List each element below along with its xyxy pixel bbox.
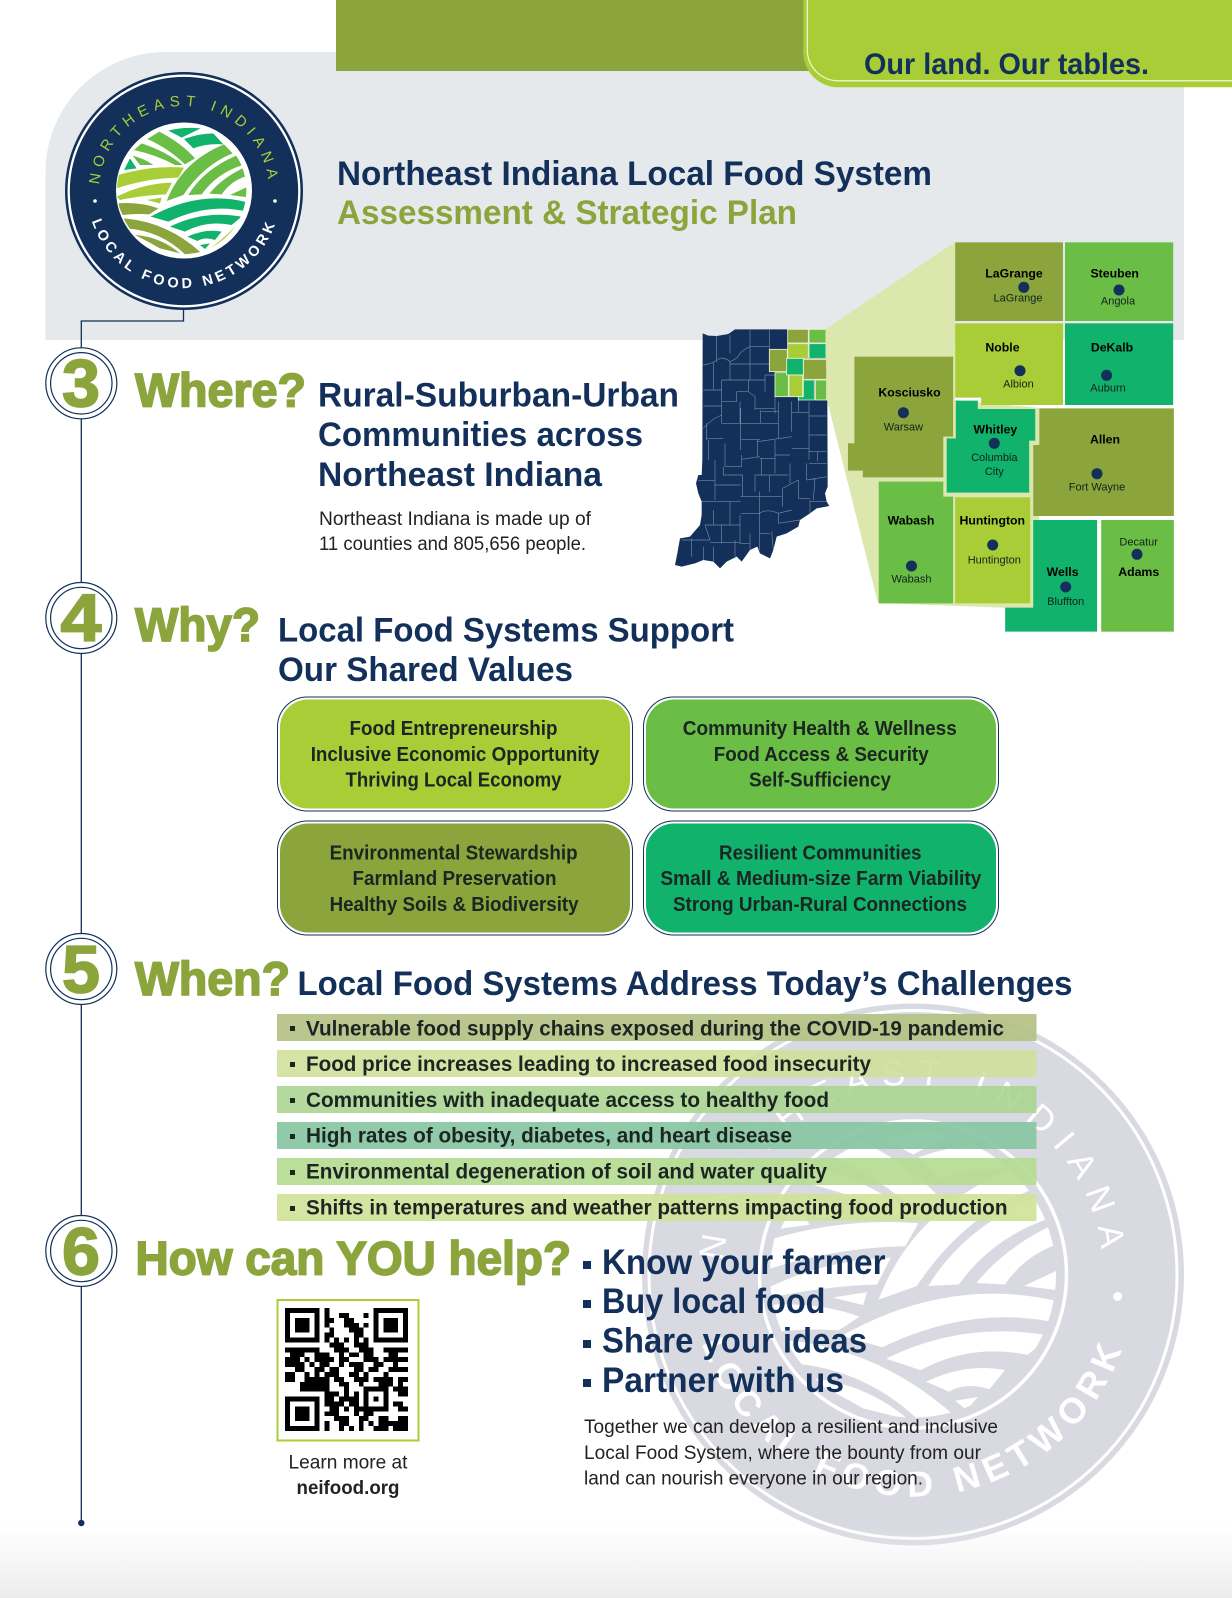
section 4 subheading: Local Food Systems Support <box>278 612 734 650</box>
challenge list: Shifts in temperatures and weather patterns impacting food production <box>306 1196 1008 1220</box>
section 3 heading: Where? <box>135 364 306 417</box>
title: Northeast Indiana Local Food System <box>337 155 932 193</box>
header tab with tagline <box>803 0 1232 87</box>
map: Indiana state <box>675 329 829 568</box>
value box: resilience: Strong Urban-Rural Connections <box>673 894 967 916</box>
map: county labels: Angola <box>1101 295 1136 307</box>
section 5 number: 5 <box>62 932 100 1008</box>
value box: economy: Food Entrepreneurship <box>350 718 558 740</box>
challenge list: Food price increases leading to increased food insecurity <box>306 1053 871 1076</box>
section 6 number: 6 <box>62 1214 100 1290</box>
tagline: Our land. Our tables. <box>864 48 1149 81</box>
header bar: olive <box>336 0 816 71</box>
panel: header background <box>46 52 1184 340</box>
value box: health: Food Access & Security <box>714 744 930 766</box>
value box: economy: Thriving Local Economy <box>346 770 562 792</box>
logo badge <box>65 72 303 310</box>
challenge list <box>277 1014 1036 1221</box>
watermark logo: NORTHEAST INDIANA <box>699 1077 1124 1258</box>
logo bottom text: LOCAL FOOD NETWORK <box>92 218 275 288</box>
map: county labels: Noble <box>985 341 1020 355</box>
section 5 heading: When? <box>135 952 290 1005</box>
map: county labels: LaGrange <box>994 293 1042 305</box>
map: zoom wedge <box>826 242 1039 608</box>
challenge list: Communities with inadequate access to healthy food <box>306 1089 829 1112</box>
map: county labels: Steuben <box>1090 267 1139 281</box>
section 3 body text <box>319 509 592 555</box>
call to action list <box>583 1243 886 1400</box>
logo fields <box>117 128 251 254</box>
call to action list: Buy local food <box>602 1282 826 1321</box>
map: county labels: Allen <box>1090 432 1120 446</box>
value box: resilience: Small & Medium-size Farm Viability <box>660 868 982 890</box>
section 5 subheading: Local Food Systems Address Today’s Challenges <box>298 965 1072 1003</box>
section 3 body text: Northeast Indiana is made up of <box>319 509 592 530</box>
section 4 subheading: Our Shared Values <box>278 651 573 689</box>
call to action list: Know your farmer <box>602 1243 886 1282</box>
closing paragraph: Together we can develop a resilient and inclusive <box>584 1417 998 1438</box>
value box: resilience: Resilient Communities <box>719 842 922 864</box>
map: county labels: DeKalb <box>1091 341 1133 355</box>
map: county labels: Auburn <box>1090 383 1126 395</box>
logo top text: NORTHEAST INDIANA <box>88 96 278 184</box>
value box: resilience <box>644 821 998 935</box>
map: county labels: Wabash <box>888 514 934 528</box>
value box: economy: Inclusive Economic Opportunity <box>311 744 600 766</box>
bottom page fade <box>0 1525 1232 1598</box>
closing paragraph: land can nourish everyone in our region. <box>584 1468 923 1490</box>
map: county labels: Huntington <box>968 555 1021 567</box>
QR caption <box>288 1452 408 1499</box>
value box: environment: Environmental Stewardship <box>330 842 578 864</box>
value box: environment: Healthy Soils & Biodiversity <box>330 894 579 916</box>
map: county labels: Wells <box>1047 565 1079 579</box>
call to action list: Share your ideas <box>602 1322 867 1360</box>
map: county labels <box>878 267 1159 608</box>
map: county labels: Decatur <box>1119 536 1158 548</box>
section 4 subheading <box>278 612 734 689</box>
closing paragraph: Local Food System, where the bounty from our <box>584 1443 982 1464</box>
value box: health: Community Health & Wellness <box>683 718 957 740</box>
map: county labels: City <box>985 466 1004 478</box>
map: county labels: Adams <box>1118 565 1159 579</box>
section 4 heading: Why? <box>135 598 260 651</box>
challenge list: Environmental degeneration of soil and water quality <box>306 1160 827 1184</box>
section 5 number <box>46 932 117 1008</box>
section 6 heading: How can YOU help? <box>136 1232 571 1284</box>
section 3 body text: 11 counties and 805,656 people. <box>319 534 586 555</box>
map: county labels: Albion <box>1003 378 1034 390</box>
QR caption: neifood.org <box>296 1478 400 1499</box>
challenge list: High rates of obesity, diabetes, and heart disease <box>306 1124 792 1148</box>
title <box>337 155 932 232</box>
section 3 subheading <box>318 377 679 494</box>
section 4 number: 4 <box>60 581 102 656</box>
value box: environment: Farmland Preservation <box>352 868 556 890</box>
value box: environment <box>278 821 632 935</box>
map: county labels: Kosciusko <box>878 386 941 400</box>
section 6 number <box>46 1214 117 1290</box>
timeline end dot <box>78 1520 85 1526</box>
map: county labels: Wabash <box>892 574 931 586</box>
map: county labels: Fort Wayne <box>1069 482 1125 494</box>
section 3 subheading: Northeast Indiana <box>318 456 603 494</box>
section 4 number <box>46 581 117 656</box>
section 3 number <box>46 347 117 422</box>
map: county labels: Whitley <box>974 422 1017 436</box>
challenge list: Vulnerable food supply chains exposed during the COVID-19 pandemic <box>306 1018 1004 1040</box>
map: county blocks <box>848 242 1174 632</box>
watermark logo: LOCAL FOOD NETWORK <box>702 1337 1122 1497</box>
map: county labels: Bluffton <box>1047 596 1084 608</box>
highlighted counties <box>769 329 827 400</box>
value box: health <box>644 697 998 811</box>
call to action list: Partner with us <box>602 1361 844 1400</box>
section 3 number: 3 <box>62 347 100 422</box>
section 3 subheading: Communities across <box>318 416 643 454</box>
section 3 subheading: Rural-Suburban-Urban <box>318 377 679 415</box>
closing paragraph <box>584 1417 998 1490</box>
map: county labels: LaGrange <box>985 267 1043 281</box>
map: county labels: Huntington <box>960 514 1025 528</box>
map: county labels: Warsaw <box>884 422 923 434</box>
watermark logo <box>642 1004 1184 1546</box>
QR caption: Learn more at <box>288 1452 408 1474</box>
value box: health: Self-Sufficiency <box>749 770 892 792</box>
value box: economy <box>278 697 632 811</box>
title: Assessment & Strategic Plan <box>337 194 797 232</box>
map: county labels: Columbia <box>971 452 1018 464</box>
QR code <box>278 1300 418 1440</box>
timeline connector <box>81 310 184 1523</box>
